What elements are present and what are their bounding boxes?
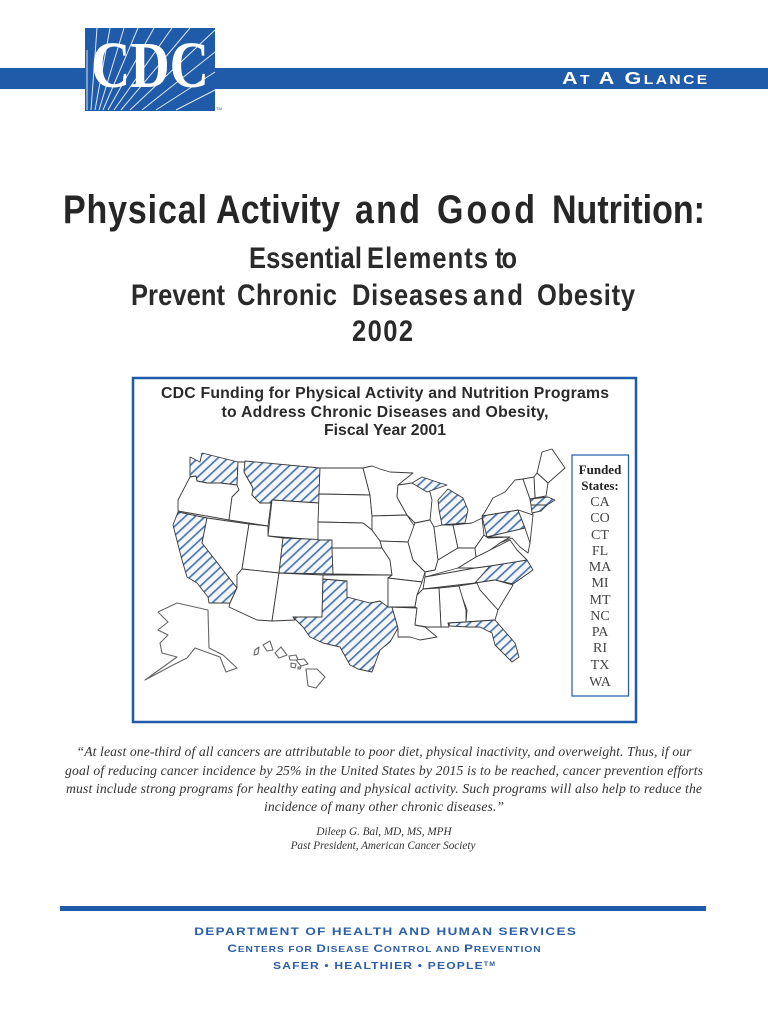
state: Indiana xyxy=(434,525,458,560)
state: South Carolina xyxy=(475,580,513,610)
state: Michigan lower xyxy=(438,489,468,525)
subtitle: Diseases xyxy=(352,278,468,311)
quote xyxy=(65,744,703,814)
CDC logo: CDC xyxy=(91,29,209,102)
legend: funded states: Funded xyxy=(579,462,622,477)
footer text: SAFER • HEALTHIER • PEOPLE xyxy=(273,961,483,972)
state: Idaho xyxy=(229,462,271,526)
state: Iowa xyxy=(372,515,415,542)
footer text: TM xyxy=(484,961,495,968)
state: New Jersey xyxy=(518,510,533,543)
state: Kentucky xyxy=(425,548,476,577)
legend: funded states: NC xyxy=(590,609,610,624)
state: Connecticut and Rhode Island xyxy=(531,505,547,513)
legend: funded states: States: xyxy=(581,478,619,493)
state: California xyxy=(173,512,237,603)
legend: funded states: FL xyxy=(592,544,608,559)
legend: funded states: MT xyxy=(590,593,611,608)
title: Nutrition: xyxy=(552,186,705,232)
state: Massachusetts xyxy=(530,497,555,505)
state: Alaska xyxy=(145,603,237,680)
state: Wyoming xyxy=(268,500,319,540)
legend: funded states: MA xyxy=(589,560,612,575)
state: Georgia xyxy=(458,583,498,622)
footer text: DEPARTMENT OF HEALTH AND HUMAN SERVICES xyxy=(194,925,576,938)
state: Arizona xyxy=(229,569,279,621)
state: Minnesota xyxy=(363,466,413,516)
state: New Mexico xyxy=(272,573,323,621)
state: Pennsylvania xyxy=(482,510,525,537)
chart title: CDC Funding for Physical Activity and Nutrition Programs xyxy=(161,385,609,402)
subtitle: to xyxy=(495,241,517,274)
state: Montana xyxy=(244,461,320,503)
legend: funded states: CO xyxy=(590,511,610,526)
subtitle: Obesity xyxy=(537,278,636,311)
legend: funded states: MI xyxy=(591,576,609,591)
footer text: CENTERS FOR DISEASE CONTROL AND PREVENTION xyxy=(227,942,541,955)
state: Wisconsin xyxy=(397,483,432,523)
state: North Dakota xyxy=(319,468,370,495)
quote attribution: Past President, American Cancer Society xyxy=(290,840,475,852)
quote: “At least one-third of all cancers are attributable to poor diet, physical inactivity, and overweight. Thus, if our xyxy=(76,744,692,759)
footer text xyxy=(194,925,576,972)
quote attribution xyxy=(290,826,475,852)
state: Missouri xyxy=(380,541,425,582)
state: Alabama xyxy=(439,586,466,627)
quote: incidence of many other chronic diseases.” xyxy=(264,799,504,814)
at a glance label: AT A GLANCE xyxy=(562,69,707,89)
state: Michigan upper xyxy=(412,477,447,492)
state: New Hampshire xyxy=(534,473,548,498)
title: Physical xyxy=(63,186,207,232)
state: Tennessee xyxy=(423,566,490,589)
state: Maine xyxy=(537,449,565,483)
panel: funding map xyxy=(133,378,636,722)
state: South Dakota xyxy=(318,494,372,530)
title: Good xyxy=(437,186,535,232)
state: Nevada xyxy=(202,518,249,588)
title xyxy=(63,186,705,232)
chart title xyxy=(161,385,609,439)
state: Texas xyxy=(293,579,398,672)
legend: funded states: TX xyxy=(591,658,609,673)
chart title: to Address Chronic Diseases and Obesity, xyxy=(222,404,548,421)
state: West Virginia xyxy=(475,535,510,557)
state: Florida xyxy=(448,620,519,662)
legend: funded states: RI xyxy=(593,641,607,656)
state: Colorado xyxy=(279,538,333,574)
chart title: Fiscal Year 2001 xyxy=(324,422,446,439)
subtitle: Essential xyxy=(249,241,362,274)
legend: funded states: CT xyxy=(591,528,609,543)
legend: funded states: PA xyxy=(592,625,609,640)
state: Utah xyxy=(242,524,283,573)
state: Arkansas xyxy=(388,578,422,607)
state: Mississippi xyxy=(415,588,441,627)
subtitle: Prevent xyxy=(131,278,225,311)
state: Oklahoma xyxy=(323,575,392,607)
state: New York xyxy=(482,479,533,516)
title: Activity xyxy=(216,186,340,232)
subtitle: Chronic xyxy=(237,278,337,311)
legend: funded states: CA xyxy=(590,495,611,510)
state: Vermont xyxy=(523,477,535,499)
state: Nebraska xyxy=(318,522,382,548)
state: Illinois xyxy=(408,520,438,572)
state: Kansas xyxy=(332,548,392,575)
state: Hawaii xyxy=(254,641,325,688)
state: Maryland and Delaware xyxy=(487,528,530,553)
quote: goal of reducing cancer incidence by 25% in the United States by 2015 is to be reached, cancer prevention efforts xyxy=(65,763,703,778)
legend: funded states: WA xyxy=(589,675,612,690)
state: Ohio xyxy=(453,518,484,548)
quote: must include strong programs for healthy eating and physical activity. Such programs will also help to reduce the xyxy=(66,781,702,796)
subtitle: Elements xyxy=(367,241,488,274)
state: Washington xyxy=(190,453,238,485)
state: Louisiana xyxy=(388,607,437,640)
state: Oregon xyxy=(178,476,239,520)
footer rule xyxy=(60,906,706,911)
US map xyxy=(145,449,565,688)
header band xyxy=(0,68,768,89)
subtitle: 2002 xyxy=(352,314,413,347)
state: Virginia xyxy=(458,540,527,568)
quote attribution: Dileep G. Bal, MD, MS, MPH xyxy=(315,826,452,838)
CDC logo: TM xyxy=(216,106,222,111)
state: North Carolina xyxy=(475,560,533,584)
title: and xyxy=(355,186,420,232)
subtitle: and xyxy=(473,278,523,311)
subtitle xyxy=(131,241,636,347)
legend: funded states xyxy=(572,455,628,696)
